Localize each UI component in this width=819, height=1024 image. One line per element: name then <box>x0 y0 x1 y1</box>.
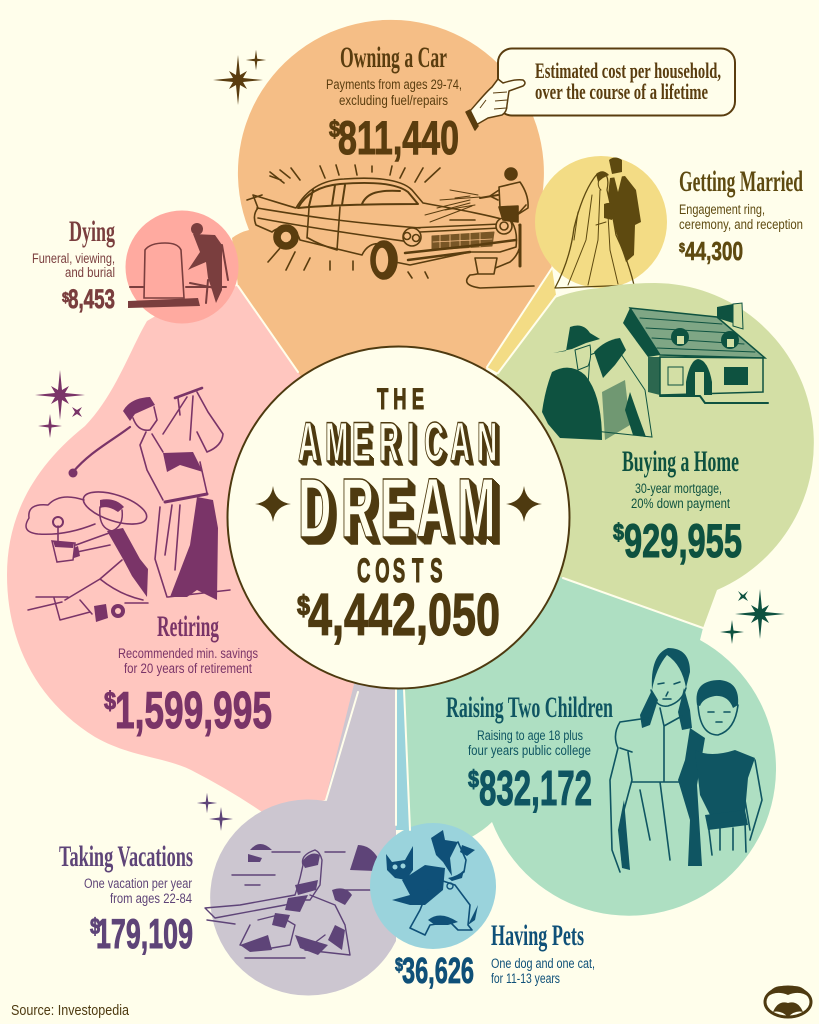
number: $929,955: 929,955 <box>624 514 742 567</box>
icon: left sparkle <box>255 486 291 522</box>
number: $1,599,995 <box>104 682 272 740</box>
source: Source: Investopedia <box>11 1002 130 1019</box>
heading: Owning a Car: Owning a Car <box>340 41 447 74</box>
number: $811,440 <box>329 111 459 164</box>
number: $8,453: 8,453 <box>68 284 115 314</box>
text: vacation description: One vacation per year <box>84 876 192 891</box>
panel: dying <box>32 210 238 324</box>
icon: sparkles <box>720 589 785 644</box>
number: $811,440: 811,440 <box>338 111 459 164</box>
icon: pointing hand <box>466 79 525 130</box>
text: dying description <box>32 251 115 280</box>
heading: Dying: Dying <box>69 215 115 248</box>
icon: sparkles <box>35 370 85 438</box>
number: $179,109 <box>90 910 193 957</box>
panel: owning a car <box>213 20 552 518</box>
text: children description: four years public college <box>468 743 591 758</box>
illustration: golfer <box>68 388 223 600</box>
illustration: car and man washing <box>247 165 534 288</box>
heading: The American Dream Costs <box>298 383 497 589</box>
number: $44,300: 44,300 <box>685 236 743 266</box>
text: wedding description <box>679 202 803 232</box>
text: pets description <box>491 956 595 986</box>
heading: Retiring: Retiring <box>157 610 219 643</box>
heading: Buying a Home: Buying a Home <box>622 445 739 478</box>
number: $8,453 <box>62 284 115 314</box>
number: $811,440: $ <box>329 116 340 142</box>
text: wedding description: Engagement ring, <box>679 202 765 217</box>
number: $36,626: $ <box>395 955 403 975</box>
heading: Taking Vacations: Taking Vacations <box>59 840 193 873</box>
text: car description <box>326 77 462 108</box>
text: car description: Payments from ages 29-74, <box>326 77 462 92</box>
number: $36,626 <box>395 950 474 991</box>
number: $8,453: $ <box>62 289 69 305</box>
callout: cost note: Estimated cost per household, <box>535 58 721 83</box>
text: vacation description <box>84 876 192 906</box>
text: Retiring description: Recommended min. savings <box>118 646 258 661</box>
heading: Raising Two Children: Raising Two Children <box>446 691 613 724</box>
callout: cost note: over the course of a lifetime <box>535 79 708 104</box>
panel: getting married <box>487 156 803 373</box>
illustration: two children <box>610 648 762 872</box>
text: pets description: One dog and one cat, <box>491 956 595 971</box>
number: $44,300: $ <box>679 240 686 255</box>
text: home description <box>631 481 730 511</box>
number: $1,599,995: 1,599,995 <box>115 682 272 740</box>
icon: right sparkle <box>506 486 542 522</box>
icon: sparkles <box>213 50 266 105</box>
text: children description: Raising to age 18 plus <box>477 728 583 743</box>
divider lines <box>238 268 703 830</box>
illustration: bride and groom <box>555 158 641 288</box>
text: children description <box>468 728 591 758</box>
illustration: couple and house <box>542 303 768 440</box>
logo: mustache mark <box>765 986 811 1017</box>
number: $179,109: $ <box>90 914 100 939</box>
callout: cost note <box>466 48 735 130</box>
number: $832,172: $ <box>468 766 480 793</box>
panel: retiring <box>7 286 399 812</box>
number: total cost: 4,442,050 <box>308 582 500 648</box>
number: $832,172: 832,172 <box>479 762 592 816</box>
text: Retiring description <box>118 646 258 676</box>
heading: The American Dream Costs: DREAM <box>298 463 495 556</box>
text: car description: excluding fuel/repairs <box>339 93 448 108</box>
number: $832,172 <box>468 762 592 816</box>
text: dying description: Funeral, viewing, <box>32 251 115 266</box>
illustration: family at the beach <box>205 844 378 958</box>
illustration: cat and dog <box>386 830 478 935</box>
heading: Having Pets: Having Pets <box>491 919 584 952</box>
panel: taking vacations <box>59 600 396 996</box>
text: Retiring description: for 20 years of retirement <box>124 661 252 676</box>
number: $1,599,995: $ <box>104 687 116 715</box>
heading: The American Dream Costs: THE <box>377 383 424 416</box>
heading: The American Dream Costs: AMERICAN <box>298 412 497 474</box>
number: $929,955: $ <box>613 519 624 545</box>
panel: raising two children <box>399 518 776 916</box>
text: home description: 30-year mortgage, <box>635 481 722 496</box>
panel: having pets <box>370 685 595 991</box>
panel: buying a home <box>399 283 814 644</box>
icon: sparkles <box>197 793 233 831</box>
number: total cost: $ <box>297 590 310 621</box>
number: $36,626: 36,626 <box>402 950 474 991</box>
text: home description: 20% down payment <box>631 496 730 511</box>
text: vacation description: from ages 22-84 <box>110 891 192 906</box>
number: $44,300 <box>679 236 743 266</box>
text: pets description: for 11-13 years <box>491 971 560 986</box>
heading: The American Dream Costs: COSTS <box>357 551 443 589</box>
illustration: gardener woman <box>26 485 230 622</box>
illustration: headstone and mourner <box>128 223 228 308</box>
center circle: title <box>228 346 570 688</box>
number: $179,109: 179,109 <box>96 910 193 957</box>
number: $929,955 <box>613 514 742 567</box>
text: dying description: and burial <box>65 265 115 280</box>
